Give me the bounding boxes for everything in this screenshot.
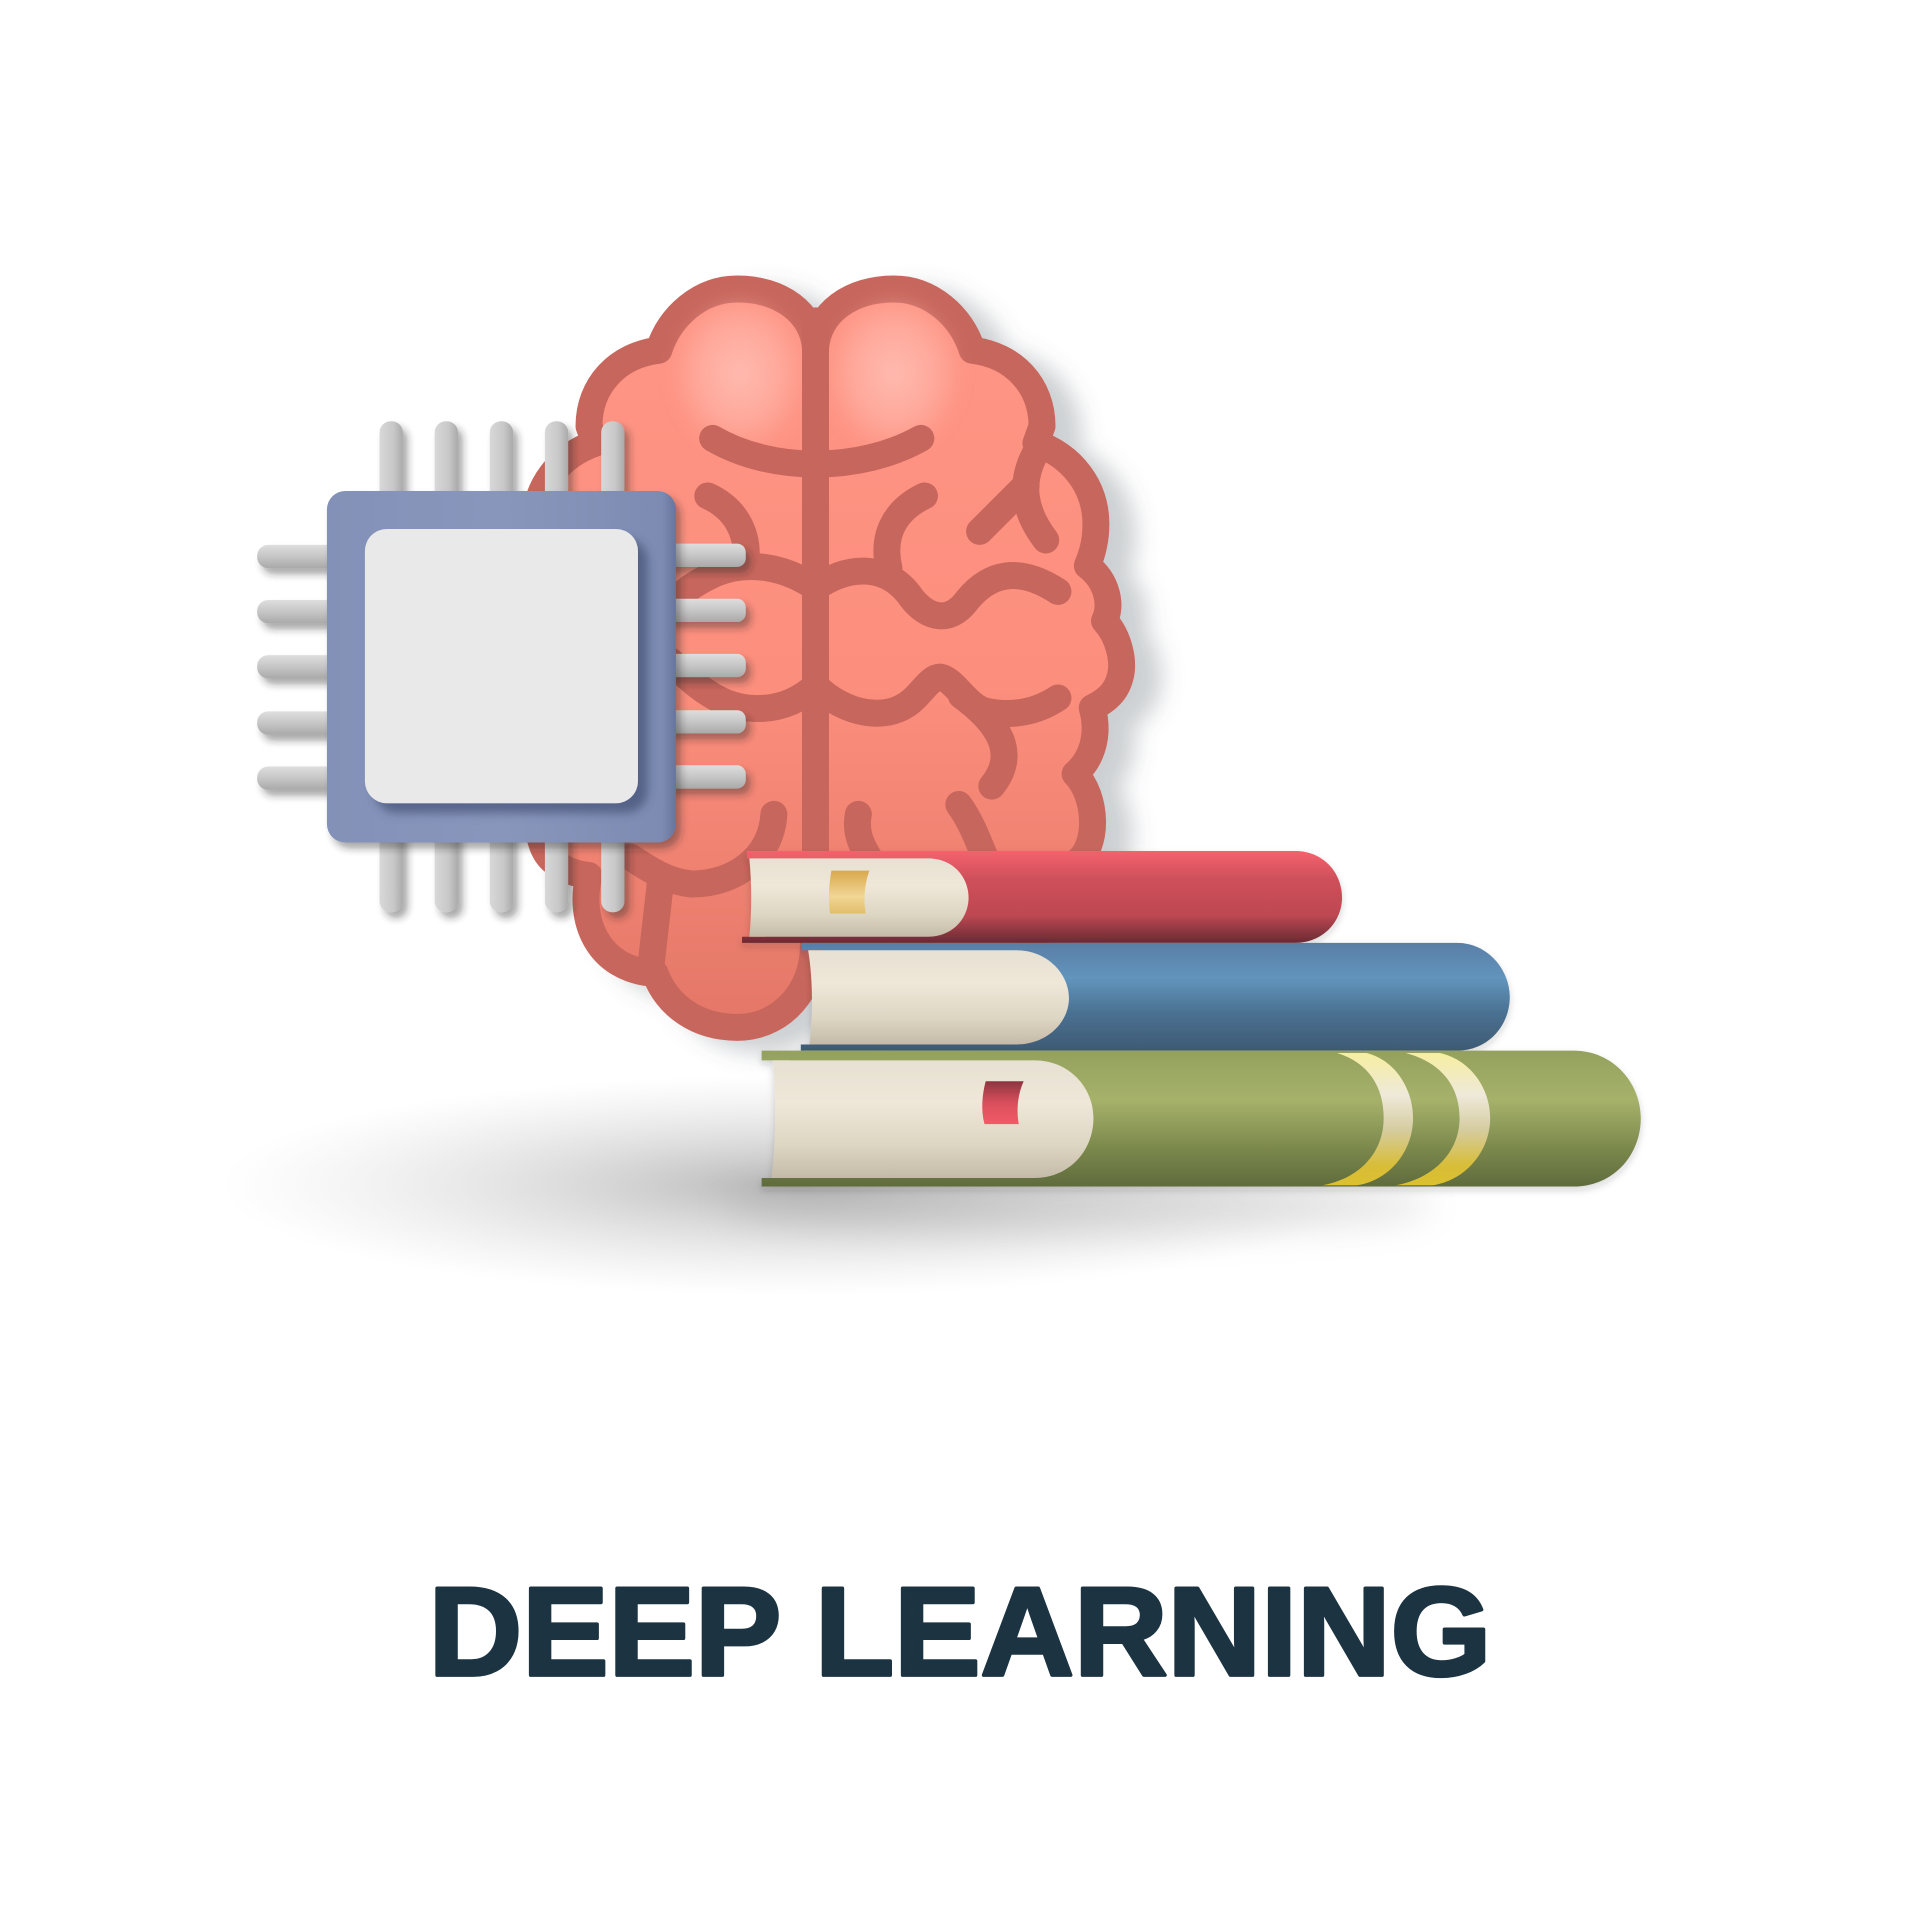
title: DEEP LEARNING [429, 1561, 1491, 1702]
brain folds [631, 321, 1058, 961]
icon: stack of books [742, 851, 1641, 1187]
gold bands [1322, 1053, 1413, 1185]
icon: microchip [257, 421, 746, 912]
blue book [801, 943, 1510, 1051]
ground shadow [220, 1075, 1433, 1296]
icon: brain [509, 289, 1122, 1027]
red book [742, 851, 1342, 943]
bookmark: red [982, 1081, 1024, 1124]
green book [762, 1051, 1641, 1187]
chip pins [257, 421, 746, 912]
brain highlights [671, 293, 962, 454]
bookmark: gold [829, 871, 869, 913]
chip body [327, 491, 676, 842]
chip inner panel [365, 529, 638, 803]
brain shape [509, 289, 1122, 1027]
